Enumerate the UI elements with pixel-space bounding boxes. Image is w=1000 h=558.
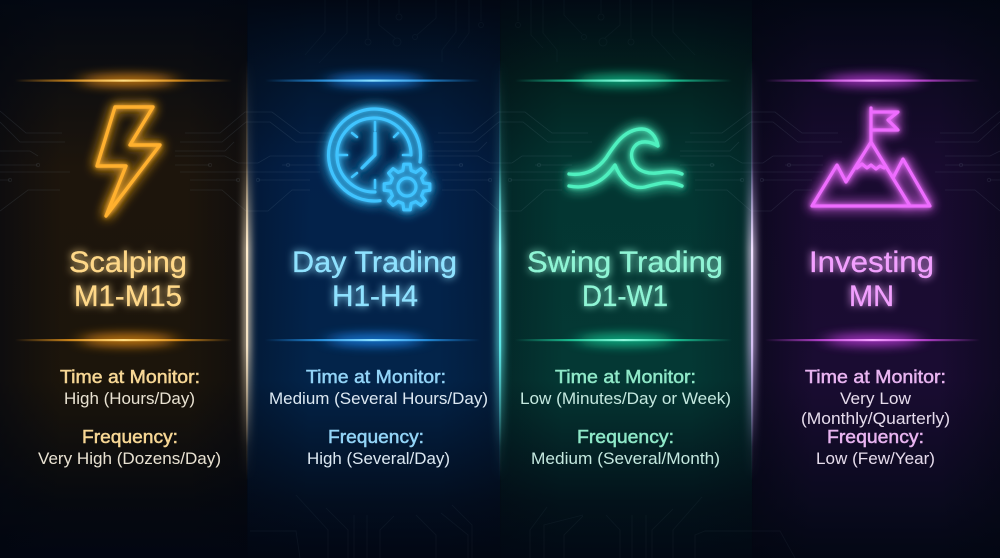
heading: scalping: Scalping bbox=[69, 246, 187, 279]
bottom circuit traces bbox=[250, 495, 795, 558]
frequency: investing bbox=[816, 426, 935, 468]
bottom glow bar bbox=[765, 334, 980, 346]
top circuit traces bbox=[305, 0, 695, 63]
heading: day trading: H1-H4 bbox=[332, 280, 418, 313]
heading: investing: Investing bbox=[809, 246, 934, 279]
frequency: scalping bbox=[38, 426, 221, 468]
heading: scalping bbox=[69, 246, 187, 313]
vertical separator: swing trading / investing bbox=[749, 60, 755, 480]
icon: wave bbox=[569, 129, 682, 187]
time at monitor: scalping: High (Hours/Day) bbox=[64, 390, 195, 408]
time at monitor: swing trading: Low (Minutes/Day or Week) bbox=[520, 390, 731, 408]
frequency: investing: Frequency: bbox=[827, 426, 924, 447]
time at monitor: investing: (Monthly/Quarterly) bbox=[801, 410, 950, 428]
time at monitor: investing: Time at Monitor: bbox=[805, 366, 946, 387]
top glow bar bbox=[765, 74, 980, 86]
heading: day trading bbox=[292, 246, 457, 313]
frequency: day trading: Frequency: bbox=[328, 426, 424, 447]
bottom glow bar bbox=[15, 334, 232, 346]
frequency: swing trading bbox=[531, 426, 720, 468]
time at monitor: scalping: Time at Monitor: bbox=[60, 366, 200, 387]
heading: swing trading: D1-W1 bbox=[582, 280, 668, 313]
heading: scalping: M1-M15 bbox=[74, 280, 182, 313]
icon: clock with gear bbox=[329, 109, 430, 210]
heading: swing trading: Swing Trading bbox=[527, 246, 723, 279]
top glow bar bbox=[265, 74, 480, 86]
frequency: day trading: High (Several/Day) bbox=[307, 450, 450, 468]
panel: investing bbox=[765, 74, 980, 468]
heading: investing bbox=[809, 246, 934, 313]
vertical separator: day trading / swing trading bbox=[497, 60, 503, 480]
frequency: scalping: Very High (Dozens/Day) bbox=[38, 450, 221, 468]
bottom glow bar bbox=[265, 334, 480, 346]
bottom glow bar bbox=[515, 334, 732, 346]
time at monitor: day trading: Time at Monitor: bbox=[306, 366, 446, 387]
heading: day trading: Day Trading bbox=[292, 246, 457, 279]
time at monitor: scalping bbox=[60, 366, 200, 408]
time at monitor: investing: Very Low bbox=[840, 390, 911, 408]
heading: investing: MN bbox=[849, 280, 894, 313]
panel: swing trading bbox=[515, 74, 732, 468]
frequency: scalping: Frequency: bbox=[82, 426, 178, 447]
time at monitor: investing bbox=[801, 366, 950, 428]
panel: day trading bbox=[265, 74, 488, 468]
icon: mountain with flag bbox=[812, 108, 930, 206]
frequency: day trading bbox=[307, 426, 450, 468]
frequency: swing trading: Frequency: bbox=[577, 426, 674, 447]
panel: scalping bbox=[15, 74, 232, 468]
top glow bar bbox=[15, 74, 232, 86]
time at monitor: day trading bbox=[269, 366, 488, 408]
icon: lightning bolt bbox=[97, 107, 160, 216]
top glow bar bbox=[515, 74, 732, 86]
time at monitor: swing trading: Time at Monitor: bbox=[555, 366, 696, 387]
time at monitor: day trading: Medium (Several Hours/Day) bbox=[269, 390, 488, 408]
heading: swing trading bbox=[527, 246, 723, 313]
frequency: swing trading: Medium (Several/Month) bbox=[531, 450, 720, 468]
time at monitor: swing trading bbox=[520, 366, 731, 408]
circuit trace background bbox=[0, 111, 1000, 211]
frequency: investing: Low (Few/Year) bbox=[816, 450, 935, 468]
vertical separator: scalping / day trading bbox=[244, 60, 250, 480]
